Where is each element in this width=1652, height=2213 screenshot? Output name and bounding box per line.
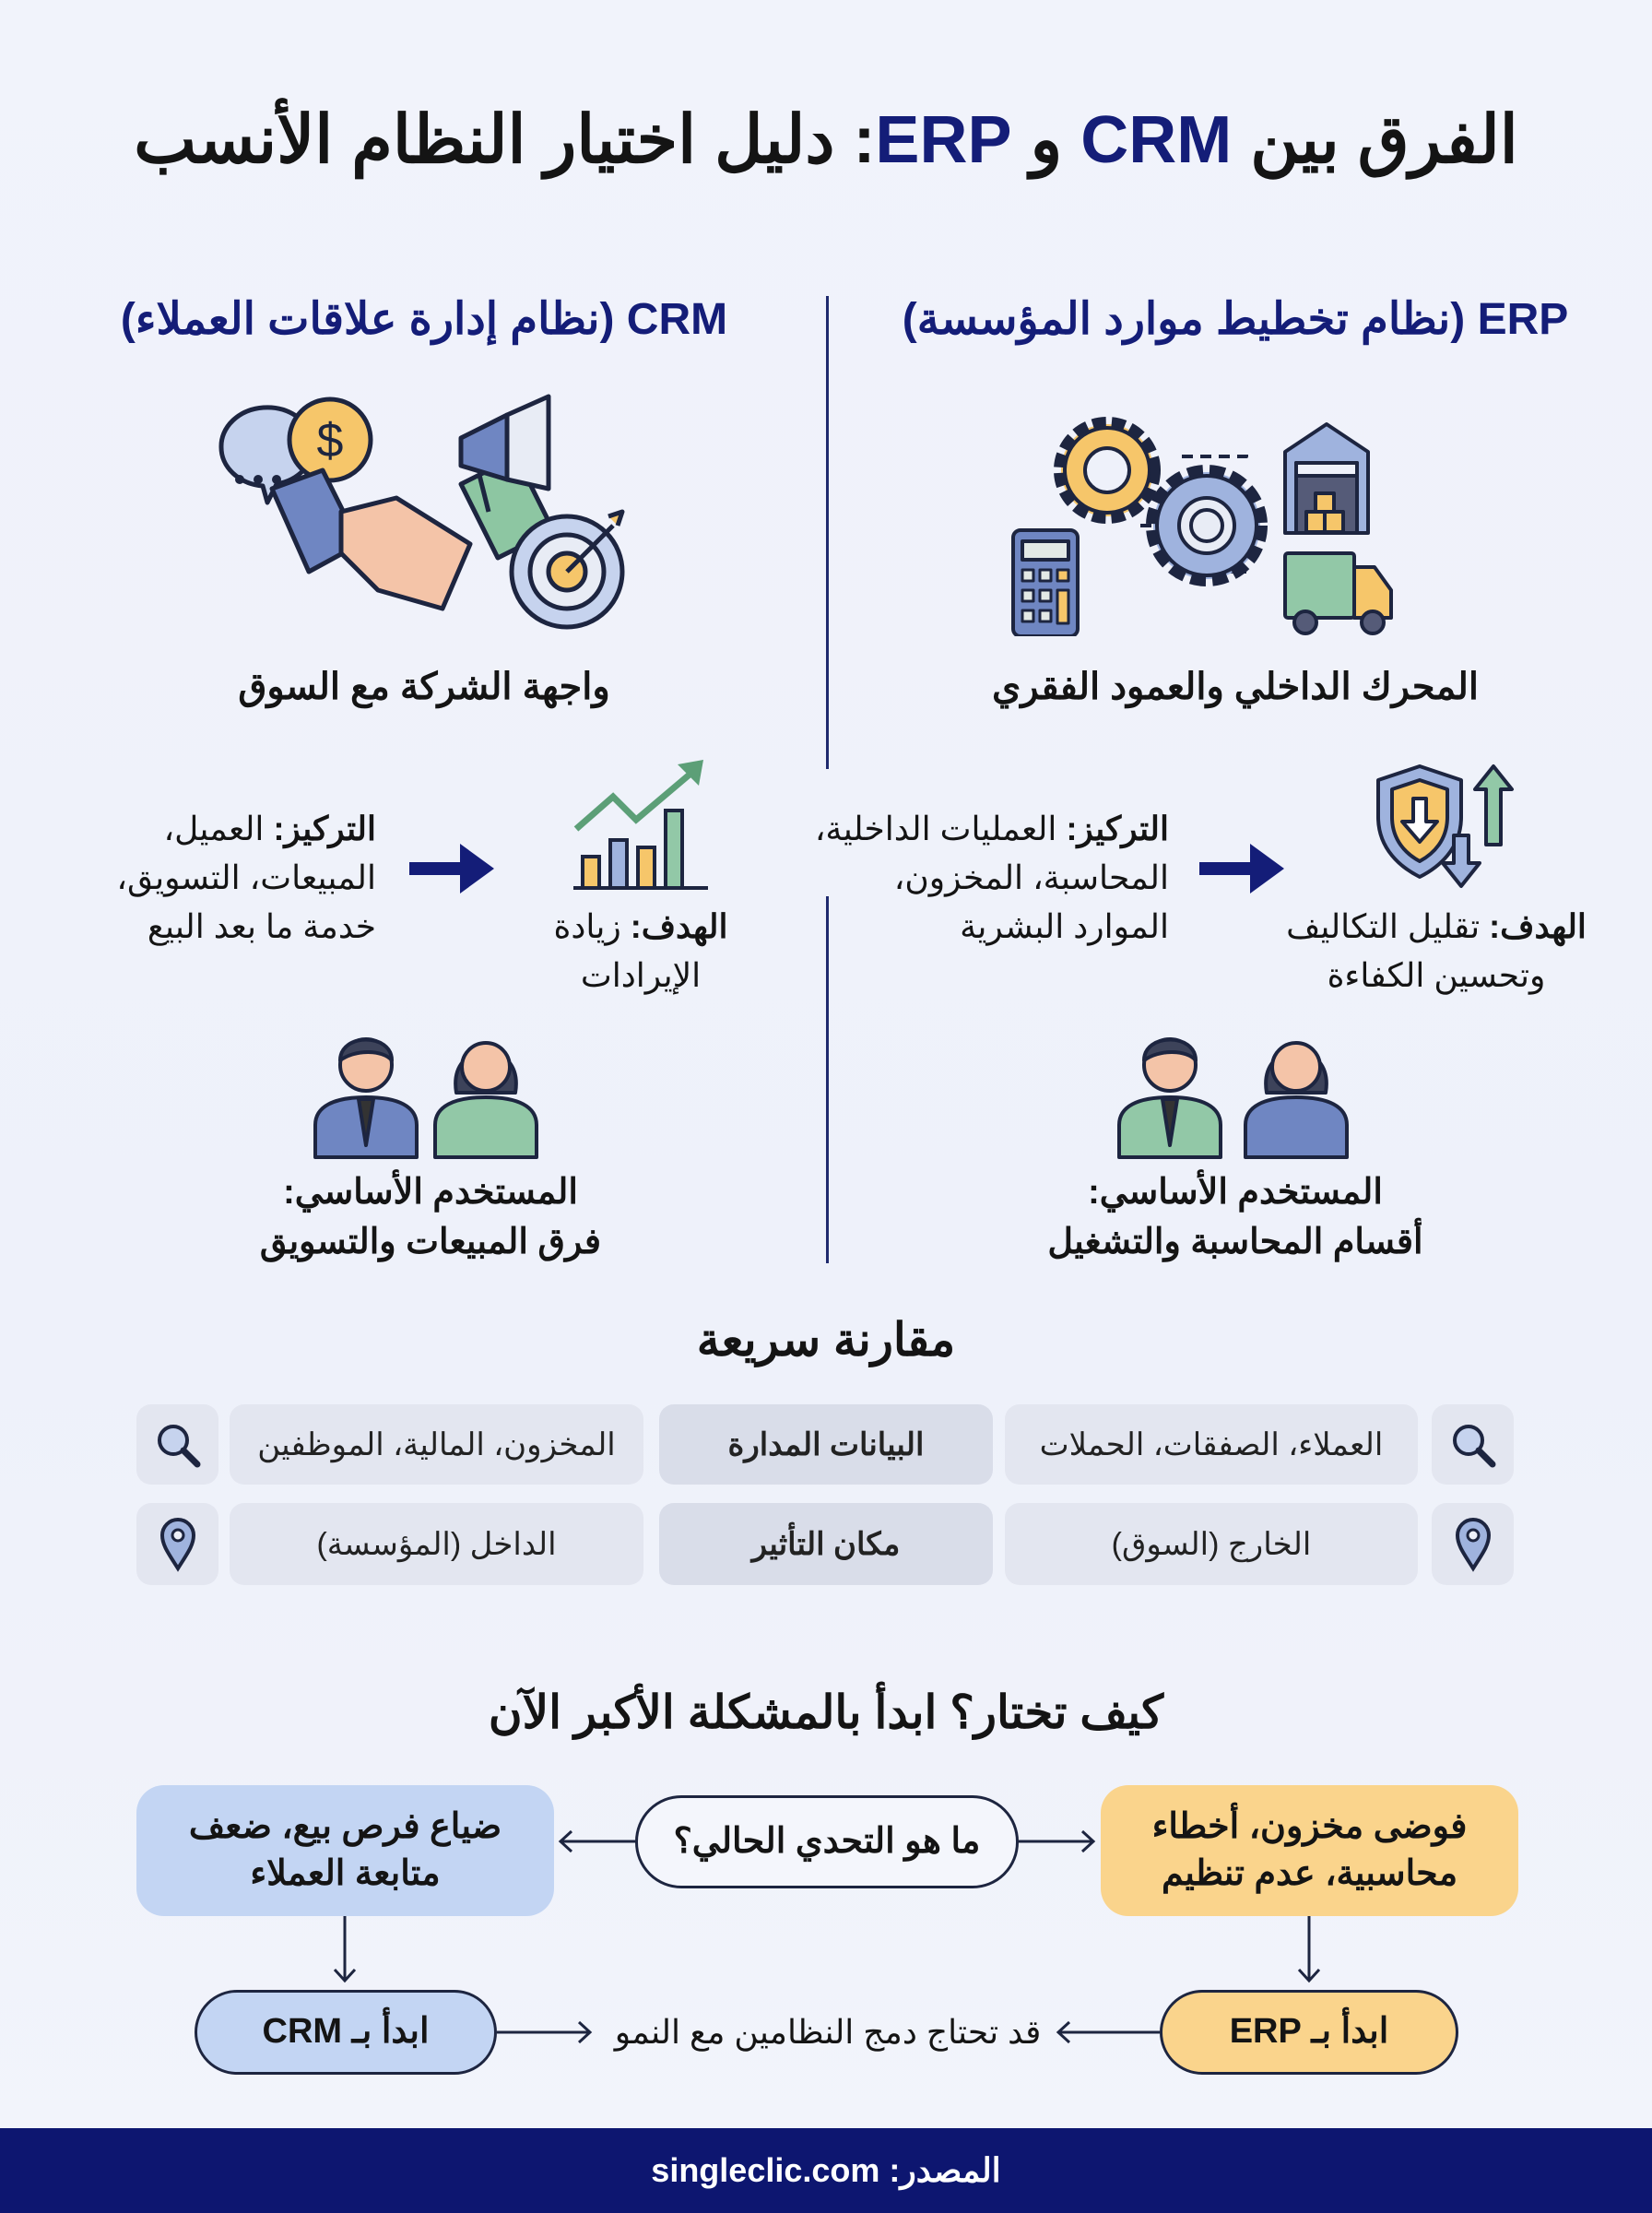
ERP user label: أقسام المحاسبة والتشغيل [1047, 1223, 1423, 1261]
box: ERP problem [1101, 1785, 1518, 1916]
row: place of impact: مكان التأثير [752, 1527, 900, 1562]
box: CRM problem [136, 1785, 554, 1916]
row: data managed [136, 1404, 1514, 1485]
icon: CRM handshake: $ [317, 414, 344, 467]
icon: shield [1376, 763, 1514, 889]
arrows [334, 1829, 1320, 2043]
ERP goal text: الهدف: تقليل التكاليف [1286, 907, 1587, 945]
ERP focus text: المحاسبة، المخزون، [894, 858, 1169, 896]
box: ERP problem: فوضى مخزون، أخطاء [1152, 1807, 1467, 1846]
icon: ERP gears [1011, 417, 1393, 636]
heading: ERP: ERP (نظام تخطيط موارد المؤسسة) [903, 295, 1568, 344]
CRM goal text: الإيرادات [581, 956, 701, 994]
subtitle: CRM: واجهة الشركة مع السوق [238, 667, 610, 707]
heading: how to choose: كيف تختار؟ ابدأ بالمشكلة الأكبر الآن [489, 1686, 1163, 1738]
ERP focus text: التركيز: العمليات الداخلية، [815, 810, 1169, 847]
box: CRM problem: ضياع فرص بيع، ضعف [189, 1807, 502, 1846]
CRM user label: المستخدم الأساسي: [283, 1173, 578, 1212]
footer: المصدر: singleclic.com [651, 2151, 1001, 2189]
row: data managed: المخزون، المالية، الموظفين [257, 1427, 616, 1462]
subtitle: ERP: المحرك الداخلي والعمود الفقري [992, 667, 1479, 707]
heading: CRM: CRM (نظام إدارة علاقات العملاء) [121, 295, 727, 344]
ERP goal text [1286, 907, 1587, 995]
ERP goal text: وتحسين الكفاءة [1328, 956, 1545, 994]
arrow: ERP [1199, 844, 1284, 893]
pill: start with CRM [195, 1990, 497, 2075]
row: data managed: العملاء، الصفقات، الحملات [1040, 1427, 1383, 1462]
pill: start with CRM: ابدأ بـ CRM [262, 2012, 430, 2051]
icon: CRM handshake [219, 395, 625, 629]
ERP focus text: الموارد البشرية [960, 907, 1169, 945]
text: integrate: قد تحتاج دمج النظامين مع النمو [615, 2013, 1041, 2051]
box: question [635, 1795, 1019, 1888]
box: CRM problem: متابعة العملاء [250, 1854, 441, 1893]
box: question: ما هو التحدي الحالي؟ [674, 1822, 980, 1861]
flowchart [136, 1785, 1518, 2075]
ERP user label [1047, 1169, 1423, 1262]
row: place of impact: الخارج (السوق) [1112, 1527, 1311, 1562]
comparison table [136, 1404, 1514, 1585]
row: data managed: البيانات المدارة [728, 1427, 924, 1462]
heading: quick comparison: مقارنة سريعة [697, 1314, 955, 1366]
CRM focus text: خدمة ما بعد البيع [148, 907, 376, 945]
CRM user label [260, 1169, 601, 1262]
row: place of impact [136, 1503, 1514, 1585]
ERP user label: المستخدم الأساسي: [1088, 1173, 1383, 1212]
title: الفرق بين CRM و ERP: دليل اختيار النظام الأنسب [134, 103, 1518, 177]
pill: start with ERP [1160, 1990, 1458, 2075]
CRM focus text: المبيعات، التسويق، [116, 858, 376, 896]
pill: start with ERP: ابدأ بـ ERP [1230, 2012, 1388, 2051]
ERP focus text [815, 810, 1169, 946]
CRM goal text: الهدف: زيادة [553, 907, 728, 945]
divider [826, 296, 829, 769]
row: place of impact: الداخل (المؤسسة) [316, 1527, 557, 1562]
CRM goal text [553, 907, 728, 995]
arrow: CRM [409, 844, 494, 893]
icon: growth chart [573, 760, 708, 890]
icon: ERP users [1117, 1037, 1349, 1159]
footer [0, 2128, 1652, 2213]
CRM focus text [116, 810, 376, 946]
CRM focus text: التركيز: العميل، [164, 810, 376, 847]
icon: CRM users [313, 1037, 538, 1159]
box: ERP problem: محاسبية، عدم تنظيم [1162, 1854, 1457, 1893]
CRM user label: فرق المبيعات والتسويق [260, 1223, 601, 1261]
